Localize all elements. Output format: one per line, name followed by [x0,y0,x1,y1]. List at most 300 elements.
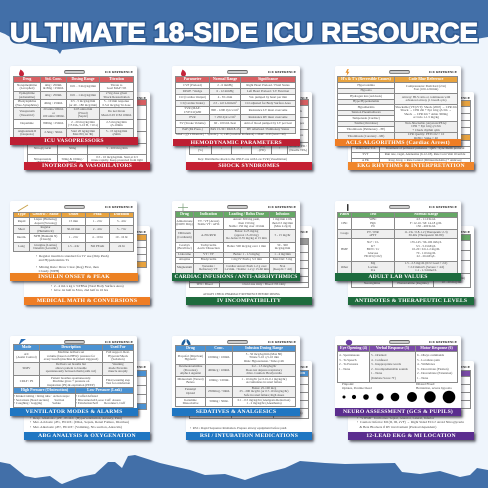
card: sedatives and analgesics (front): Hypnotic [185,357,196,361]
card: ACLS algorithms (front): advanced airway (1 breath q 6s) [406,98,446,102]
card: cardiac infusions and anti-arrhythmics (front): (DOW Drip) [176,222,193,226]
card: antidotes and therapeutic levels (back): Levels [447,235,457,239]
card: medical math and conversions (back): • Give 1st half in 8 hrs, 2nd half in 16 hrs [51,288,108,292]
card: neuro assessment GCS and pupils (front): Dilated Fixed: [416,382,435,386]
card: cardiac infusions and anti-arrhythmics (front): Drug [180,212,189,216]
card: IV incompatibility (back): Rule [260,239,268,243]
icon: lungs [181,339,191,345]
card: adult lab values (front): 22 - 26 mEq/L [417,254,435,258]
card: ventilator modes and alarms (front): inspiration (PS) & expiration (PEEP) [47,383,95,387]
card: ventilator modes and alarms (front): Delivers set breaths but [56,362,86,366]
card: cardiac infusions and anti-arrhythmics (front): then 150 mg [239,220,254,224]
card: neuro assessment GCS and pupils (front): Verbal Response (5) [376,346,409,350]
card: ICU vasopressors (front): (Giapreza) [20,132,34,136]
card: insulin onset and peak (front): ICU REFERENCE [105,205,133,209]
card: adult lab values (front): 70 - 110 mg/dL [416,251,436,255]
card: ventilator modes and alarms (front): • Kinked tubing / biting tube · Action steps: [14,394,70,398]
card: sedatives and analgesics (front): Risk: Hypotension / Tube q12h [244,359,284,363]
card: 12-lead EKG and MI location (back): & Beta Blockers if RV involvement (Preload dependent) [360,425,436,429]
card: sedatives and analgesics (front): 1 - 10 mg/hr (or 0.01-0.1 mg/kg/hr) [241,376,287,380]
card: insulin onset and peak (front): 1.5 - 4 hr [68,244,79,248]
card: insulin onset and peak (front): Cloudy (NPH) [39,269,59,273]
card: inotropes and vasodilators (back): 50mg & 100mg / 250mL [62,156,83,164]
card: insulin onset and peak (front): 10 - 16 hr [115,235,128,239]
card: insulin onset and peak (front): 15 min [69,219,78,223]
card: insulin onset and peak (front): Detemir (Levemir) [33,246,58,250]
card: IV incompatibility (back): Drug [200,239,209,243]
card: shock syndromes (back): CO [219,100,224,104]
card: ICU vasopressors (front) [10,66,137,145]
card: shock syndromes (back): PCWP [256,100,267,104]
card: RSI intubation medications (back): Drug [206,371,215,375]
card: inotropes and vasodilators (back): INOTROPES & VASODILATORS [42,163,132,169]
card: shock syndromes (back): ICU REFERENCE [280,96,308,100]
card: RSI intubation medications (back): Rocuronium [203,409,218,413]
card: ACLS algorithms (front): Fast (100-120/min) [414,87,438,91]
card: shock syndromes (back): , (PD) [258,148,265,152]
card: antidotes and therapeutic levels (back): Drug [368,235,376,239]
card: sedatives and analgesics (front): 25 - 200 mcg/hr (or 0.7-10 mcg/kg/hr) [240,389,288,393]
card: ACLS algorithms (front): CPR + Epi 1mg q3-5m [411,124,441,128]
card: sedatives and analgesics (front): Benzo [186,380,195,384]
card: ICU vasopressors (front): 5 - 15 ng/kg/min [106,128,127,132]
card: hemodynamic parameters (front): Significance [258,77,278,81]
card: cardiac infusions and anti-arrhythmics (front): (Keep K > 4.0) [273,267,292,271]
card: shock syndromes (back): ↑(eq) [258,144,265,148]
card: antidotes and therapeutic levels (back): Phentolamine (Regitine) [397,281,429,285]
card: antidotes and therapeutic levels (back): Lithium [447,264,457,268]
card: hemodynamic parameters (front): ICU REFERENCE [268,70,296,74]
card: cardiac infusions and anti-arrhythmics (front): Cerebyx [179,242,190,246]
card: neuro assessment GCS and pupils (front): 4 - Confused [371,358,387,362]
card: neuro assessment GCS and pupils (front): 1 - None [339,367,350,371]
card: ventilator modes and alarms (front): Machine gives + pressure on [53,379,89,383]
card: hemodynamic parameters (front): PVR [189,115,196,119]
card: medical math and conversions (back): Formula [100,235,114,239]
card: hemodynamic parameters (front): CO adjusted for Body Surface Area [245,101,291,105]
card: neuro assessment GCS and pupils (front): 1 - None [417,376,428,380]
card: adult lab values (front): Lactate [368,264,378,268]
card: adult lab values (front): Na+ / Cl- [367,240,379,244]
card: shock syndromes (back): Key: Distributive shock is the ONLY one with Low SVR (Vasodilation) [198,156,287,160]
card: hemodynamic parameters (front): SV (Stroke Volume) [180,121,205,125]
card: ICU vasopressors (front): Start 20 ng/kg/min [71,128,95,132]
card: cardiac infusions and anti-arrhythmics (front): (Max 2.2g/d) [274,224,291,228]
card: antidotes and therapeutic levels (back) [348,226,474,305]
card: ventilator modes and alarms (front): CPAP / PS [20,379,33,383]
card: 12-lead EKG and MI location (back): I, aVL [428,402,436,406]
card: inotropes and vasodilators (back): Nitroglycerin [34,146,51,150]
card: sedatives and analgesics (front): 500mg / 50mL [210,399,228,403]
card: inotropes and vasodilators (back): titrate rapidly. Keep protected from light [91,158,143,162]
card: ICU vasopressors (front): 4mg / 250mL [45,93,62,97]
card: RSI intubation medications (back): Notes [287,402,295,406]
card: 12-lead EKG and MI location (back): • Caution: Inferior MI (II, III, aVF) → Right Sided ECG? Avoid Nitroglycerin [357,420,464,424]
icon: blood drop [19,70,24,76]
card: shock syndromes (back): Pressors [293,133,303,137]
card: adult lab values (front): F: 12-16 / M: 14-18 g/dL [410,221,442,225]
card: neuro assessment GCS and pupils (front): NEURO ASSESSMENT (GCS & PUPILS) [343,409,453,415]
card: shock syndromes (back): ? [241,146,242,150]
card: 12-lead EKG and MI location (back): V1-V4 [428,386,436,390]
card: hemodynamic parameters (front): Parameter [184,77,201,81]
card: 12-lead EKG and MI location (back): 12-LEAD EKG & MI LOCATION [366,433,456,439]
card: ventilator modes and alarms (front): every breath (machine & patient triggered) [44,357,98,361]
card: ICU vasopressors (front): 0.01 - 1 mcg/kg/min [70,93,96,97]
card: ICU vasopressors (front): Titrate to [111,82,122,86]
card: ICU vasopressors (front): Shock Resuscitation [104,94,129,98]
card: ICU vasopressors (front): 4mg / 250mL [45,82,62,86]
card: ACLS algorithms (front): Hypoxia [360,88,371,92]
card: medical math and conversions (back): MEDICAL MATH & CONVERSIONS [37,298,137,304]
card: 12-lead EKG and MI location (back): • "STEMI" Territories: Septal, Anterior, Lateral, Inferior [357,416,434,420]
card: EKG rhythms and interpretation (back): QRS [422,121,428,125]
card: shock syndromes (back): SHOCK SYNDROMES [218,163,280,169]
card: neuro assessment GCS and pupils (front): Motor Response (6) [420,346,453,350]
card: shock syndromes (back): CVP [276,100,284,104]
card: adult lab values (front): < 2.0 mmol/L (Severe > 4.0) [408,264,444,268]
card: ABG analysis and oxygenation (back): • Met. Alkalosis: pH↑, HCO3↑ (Vomiting, NG suction, Antacids) [30,425,122,429]
card: ACLS algorithms (front): Compressions: Push hard (2 in) [406,84,446,88]
card: adult lab values (front): 150 - 400 K/uL [416,224,436,228]
card: inotropes and vasodilators (back): Titrate [113,110,121,114]
card: ventilator modes and alarms (front): Description [61,345,81,349]
card: ACLS algorithms (front): Code Blue Reference [409,77,443,81]
card: ICU vasopressors (front): Drug [23,77,31,81]
card: RSI intubation medications (back): Onset [287,378,295,382]
card: ventilator modes and alarms (front): Mode [22,345,31,349]
card: ICU vasopressors (front): Goal MAP >65 [107,86,126,90]
card: ventilator modes and alarms (front): Weaning [112,362,124,366]
card: adult lab values (front): 10-20 / 0.6-1.2 mg/dL [412,247,440,251]
card: ICU vasopressors (front): ICU VASOPRESSORS [44,138,104,144]
card: RSI intubation medications (back): Onset / Duration [277,371,305,375]
card: IV incompatibility (back): Flush [260,270,268,274]
card: cardiac infusions and anti-arrhythmics (front): N/A [280,264,285,268]
card: 12-lead EKG and MI location (back): Leads [427,371,437,375]
card: cardiac infusions and anti-arrhythmics (front): Aortic Dissection [197,246,220,250]
card: shock syndromes (back): Tamponade [193,144,208,148]
card: ACLS algorithms (front): ROSC: Spike > 40 [414,136,438,140]
card: IV incompatibility (back): Own Line [258,246,270,250]
card: inotropes and vasodilators (back): Risk: Cyanide Tox [105,162,129,166]
card: insulin onset and peak (front): Glargine (Lantus) [34,242,57,246]
card: cardiac infusions and anti-arrhythmics (front): Magnesium [177,265,192,269]
card: adult lab values (front): PT / INR [367,230,379,234]
card: insulin onset and peak (front): Aspart (Novolog) [34,220,57,224]
card: insulin onset and peak (front): NPH (Humulin N) [34,234,57,238]
card: shock syndromes (back): Relieve: PD / [289,144,307,148]
card: ICU vasopressors (front): (or 40 - 180 mcg/min) [69,102,97,106]
card: shock syndromes (back): (%) [198,148,203,152]
card: hemodynamic parameters (front) [172,66,300,146]
card: ventilator modes and alarms (front): • Disconnected/Loose Cuff Assess [76,398,121,402]
card: ACLS algorithms (front): Hydrogen Ion (Acidosis) [350,94,382,98]
card: sedatives and analgesics (front): Opioid [186,391,195,395]
card: insulin onset and peak (front): 2 - 4 hr [93,227,102,231]
card: shock syndromes (back): Fluids [294,109,302,113]
card: sedatives and analgesics (front): 100mg / 100mL [209,378,229,382]
card: IV incompatibility (back): Almost Everything (Epi, Versed): Run Alone [235,277,293,281]
card: 12-lead EKG and MI location (back): V5-V6 (aVL) [423,394,441,398]
card: hemodynamic parameters (front): 60 - 100 mL/beat [214,121,236,125]
card: neuro assessment GCS and pupils (front): Opiates, Pontine bleed [342,386,372,390]
card: 12-lead EKG and MI location (back): II, III, aVF [425,378,439,382]
card: neuro assessment GCS and pupils (front): 2 - To Pressure [339,362,358,366]
card: cardiac infusions and anti-arrhythmics (front): Refractory VT [199,267,218,271]
card: hemodynamic parameters (front): 2 - 6 mmHg [217,83,233,87]
card: ABG analysis and oxygenation (back): 22-26 [103,396,111,400]
card: neuro assessment GCS and pupils (front): 3 - Inappropriate words [371,362,401,366]
card: neuro assessment GCS and pupils (front): Eye Opening (4) [340,346,367,350]
card: 12-lead EKG and MI location (back) [348,361,474,440]
card: ventilator modes and alarms (front): SIMV [22,366,30,370]
icon: syringe [18,204,28,212]
card: neuro assessment GCS and pupils (front): 5 - Localizes pain [417,358,440,362]
title: ULTIMATE 18-SIDE ICU RESOURCE [10,18,478,48]
card: sedatives and analgesics (front): Titrate 5-10 q 5-10 min [249,355,279,359]
card: neuro assessment GCS and pupils (front): 3 - Decorticate (Flexion) [417,367,449,371]
card: sedatives and analgesics (front): Drug [186,346,195,350]
card: cardiac infusions and anti-arrhythmics (front): Max Dal: 3 mg [273,257,292,261]
card: cardiac infusions and anti-arrhythmics (front): (Cardizem) [177,234,192,238]
card: ICU vasopressors (front): 2.5mg / 50mL [44,130,63,134]
card: adult lab values (front): 30-40s (Therapeutic 60-80) [408,233,444,237]
card: neuro assessment GCS and pupils (front): 1 - None [371,371,382,375]
card: ventilator modes and alarms (front): mode Prevents [109,366,127,370]
card: insulin onset and peak (front): (Cloudy) [40,237,51,241]
card: RSI intubation medications (back): RSI / INTUBATION MEDICATIONS [200,433,298,439]
card: ACLS algorithms (front): ICU REFERENCE [429,70,457,74]
card: ABG analysis and oxygenation (back): • Resp. Alkalosis: pH↑, PCO2↓ (Hyperventilation, Anxiety, Pain) [30,416,122,420]
card: ventilator modes and alarms (front): Test for extubation [106,381,130,385]
card: cardiac infusions and anti-arrhythmics (front): VT / VF (Arrest) [198,219,219,223]
card: ventilator modes and alarms (front): • Extubation/Self Reconnect, Cuff [76,401,125,405]
card: medical math and conversions (back): gtt/min [102,255,112,259]
card: neuro assessment GCS and pupils (front): (Intubate Score ?T) [371,376,396,380]
card: inotropes and vasodilators (back): Conc. [68,100,77,104]
card: ACLS algorithms (front): H's & T's (Reversible Causes) [341,77,391,81]
card: adult lab values (front): Plt [371,224,375,228]
card: RSI intubation medications (back): 0.7 mg/kg [246,411,259,415]
card: cardiac infusions and anti-arrhythmics (front): then 0.5 mg/min [272,220,293,224]
card: IV incompatibility (back): Central [259,262,269,266]
card: insulin onset and peak (front): 1 - 2 hr [93,219,102,223]
card: hemodynamic parameters (front): Resistance LV must overcome [249,108,287,112]
card: neuro assessment GCS and pupils (front): 2 - Decerebrate (Extension) [417,371,452,375]
card: ICU vasopressors (front): (Vasostrict) [20,112,34,116]
card: hemodynamic parameters (front): Amt of blood pumped by LV per beat [244,121,292,125]
card: adult lab values (front): CBC [341,221,348,225]
card: ICU vasopressors (front): q5min [112,132,121,136]
card: shock syndromes (back): ↓ [221,146,222,150]
card: neuro assessment GCS and pupils (front): Pinpoint: [342,382,354,386]
card: ICU vasopressors (front): 0.5-6 mcg/kg/ hr dose [102,102,130,106]
card: cardiac infusions and anti-arrhythmics (front): Diltiazem [178,231,191,235]
card: antidotes and therapeutic levels (back): Vanc [449,253,455,257]
card: ACLS algorithms (front) [335,66,461,146]
card: insulin onset and peak (front): • Mixing Rule: Draw Clear (Reg) First, then [36,265,99,269]
card: inotropes and vasodilators (back): Drug [38,100,47,104]
card: EKG rhythms and interpretation (back): EKG RHYTHMS & INTERPRETATION [357,163,465,169]
card: RSI intubation medications (back): 2 (min) / 30 (min) [279,411,303,415]
icon: medical cross [178,204,188,211]
card: cardiac infusions and anti-arrhythmics (front): ICU REFERENCE [268,205,296,209]
card: EKG rhythms and interpretation (back): Treatment of perfused/ pulseless · QRS · Sync/Defib protocol [386,146,464,150]
card: ABG analysis and oxygenation (back): ABG ANALYSIS & OXYGENATION [38,433,136,439]
card: medical math and conversions (back) [24,226,150,305]
card: antidotes and therapeutic levels (back): Digoxin [447,243,457,247]
card: sedatives and analgesics (front): Dissociative [183,401,198,405]
card: ventilator modes and alarms (front): Patient breathes spontaneously. [51,376,91,380]
card: EKG rhythms and interpretation (back): Rate [422,107,428,111]
card: ACLS algorithms (front): Hypo/Hyperkalemia [353,99,379,103]
card: ICU vasopressors (front): Mean 0.03 U/M 100mL [101,112,132,116]
card: ventilator modes and alarms (front): • Cuffed deflated [76,394,98,398]
card: medical math and conversions (back): mcg/kg/min [99,241,115,245]
card: cardiac infusions and anti-arrhythmics (front): Stable VT / AFib [198,222,219,226]
card: adult lab values (front): 1.1 - 1.3 mmol/L [415,268,437,272]
card: ventilator modes and alarms (front): • Secretions (Need suction) Suction [14,398,64,402]
card: sedatives and analgesics (front): 5 - 50 mcg/kg/min (Max 80) [246,352,282,356]
card: insulin onset and peak (front): 1 - 2 hr [69,235,78,239]
card: inotropes and vasodilators (back): ICU REFERENCE [118,96,146,100]
card: neuro assessment GCS and pupils (front): 3 - To Speech [339,358,357,362]
card: ventilator modes and alarms (front): volume (based on PBW)/ pressure for [47,354,95,358]
card: cardiac infusions and anti-arrhythmics (front): Bradycardia [201,257,216,261]
card: ACLS algorithms (front): Tension Pneumothorax [351,110,381,114]
card: ICU vasopressors (front): or [52,111,55,115]
card: ICU vasopressors (front): (Levophed) [20,86,34,90]
card: insulin onset and peak (front): 24 hr [118,244,125,248]
card: IV incompatibility (back): Sodium Bicarb [195,277,214,281]
card: neuro assessment GCS and pupils (front): 5 - Oriented [371,353,386,357]
card: hemodynamic parameters (front): Normal Range [213,77,237,81]
card: sedatives and analgesics (front) [172,336,300,416]
card: neuro assessment GCS and pupils (front): 6 - Obeys commands [417,353,444,357]
card: RSI intubation medications (back): ICU REFERENCE [280,365,308,369]
card: ventilator modes and alarms (front): muscle atrophy [108,369,128,373]
card: cardiac infusions and anti-arrhythmics (front): Infusion [276,212,289,216]
card: ACLS algorithms (front): or Lido 1-1.5 mg/kg [413,115,439,119]
card: inotropes and vasodilators (back): Titrate [113,135,121,139]
card: ACLS algorithms (front): Shock → CPR 2m + Amio 300mg [404,112,448,116]
card: IV incompatibility (back): IV INCOMPATIBILITY [217,298,281,304]
card: shock syndromes (back): SVR [238,100,245,104]
card: insulin onset and peak (front): Rapid [18,219,25,223]
card: insulin onset and peak (front): 3 - 4 hr [117,219,126,223]
card: hemodynamic parameters (front): CO (Cardiac Output) [179,95,206,99]
card: ACLS algorithms (front): Toxins (Overdose) [354,121,378,125]
card: ventilator modes and alarms (front): VENTILATOR MODES & ALARMS [26,408,122,414]
card: ventilator modes and alarms (front): (Sedation) [111,357,125,361]
card: sedatives and analgesics (front): 400mcg / 100mL [208,368,230,372]
card: ventilator modes and alarms (front): A/C [24,352,29,356]
card: insulin onset and peak (front): INSULIN ONSET & PEAK [38,274,110,280]
card: cardiac infusions and anti-arrhythmics (front): Torsades / [202,264,215,268]
card: ventilator modes and alarms (front): Used For [110,345,126,349]
card: sedatives and analgesics (front): 1 - 2 mg/kg/hr (Anesthesia) [246,401,282,405]
card: EKG rhythms and interpretation (back): Ventricular T/A [355,146,376,150]
card: shock syndromes (back): (Needle TPA) [289,148,307,152]
card: ABG analysis and oxygenation (back): • Resp. Acidosis: pH↓, PCO2↑ (Hypoventilation, COPD, Opioids) [30,411,124,415]
card: IV incompatibility (back): Dedicated [258,254,270,258]
card: cardiac infusions and anti-arrhythmics (front): Amiodarone [177,219,192,223]
card: ICU vasopressors (front): (Adrenaline) [19,94,35,98]
card: hemodynamic parameters (front): 4 - 8 L/min [218,95,232,99]
card: insulin onset and peak (front): and Hyperkalemia Tx [39,258,69,262]
card: cardiac infusions and anti-arrhythmics (front): Bolus: 0.25 mg/kg [235,229,258,233]
card: neuro assessment GCS and pupils (front): 2 - Incomprehensible sounds [371,367,408,371]
card: ICU vasopressors (front): Vasopressin [19,109,35,113]
icon: ventilator [18,339,26,344]
card: antidotes and therapeutic levels (back): Glucagon / Calcium [400,274,426,278]
card: sedatives and analgesics (front): ICU REFERENCE [268,340,296,344]
card: adult lab values (front): Coags [341,231,348,235]
icon: brain [346,340,352,345]
card: ventilator modes and alarms (front): Hypoxia/Shock [108,354,128,358]
card: cardiac infusions and anti-arrhythmics (front): Atropine [179,257,190,261]
card: ABG analysis and oxygenation (back) [24,361,150,440]
card: antidotes and therapeutic levels (back): Neostigmine [364,281,380,285]
card: sedatives and analgesics (front): 0.1 - 0.5 mg/kg/hr (Analgesia Reduction) [238,398,290,402]
card: ICU vasopressors (front): (Fixed) [78,111,88,115]
card: neuro assessment GCS and pupils (front): 4 - Withdraws [417,362,435,366]
card: cardiac infusions and anti-arrhythmics (front): 1 mg IV Push q 3-5 min [231,257,262,261]
card: hemodynamic parameters (front): CVP (Preload) [183,83,202,87]
card: EKG rhythms and interpretation (back): Key Features [414,101,436,105]
card: sedatives and analgesics (front): Ketamine [184,398,197,402]
card: ICU vasopressors (front): Max 80 (1st 3h) [73,132,93,136]
card: RSI intubation medications (back): Duration [285,386,297,390]
card: 12-lead EKG and MI location (back): ICU REFERENCE [442,365,470,369]
card: RSI intubation medications (back) [186,361,312,440]
top blue torn band [0,0,488,54]
card: hemodynamic parameters (front): PAP (PA Press.) [182,127,203,131]
card: ICU vasopressors (front): Norepinephrine [17,82,37,86]
card: ICU vasopressors (front): ICU REFERENCE [105,70,133,74]
card: ventilator modes and alarms (front): Low Pressure (Leak) [87,388,122,392]
card: medical math and conversions (back): mL/hr [103,248,111,252]
card: sedatives and analgesics (front): Accumulates in renal failure [246,380,282,384]
card: shock syndromes (back): Inotropes [292,121,304,125]
card: inotropes and vasodilators (back): Dose [113,100,121,104]
card: ICU vasopressors (front): (Septic) [78,114,88,118]
card: EKG rhythms and interpretation (back): P wave [420,114,430,118]
card: EKG rhythms and interpretation (back): Irreg. Irreg. = Rate Control (Diltiazem/Amio) + Anticoag [388,158,462,162]
card: ACLS algorithms (front): + Check rhythm q2m [412,128,440,132]
card: ICU vasopressors (front): Std. Conc. [45,77,62,81]
card: inotropes and vasodilators (back): 5 - 200 mcg/min [106,146,128,150]
card: hemodynamic parameters (front): 6 - 12 mmHg [216,89,234,93]
card: ACLS algorithms (front): Airway: BLS ratio or continuous with [402,94,450,98]
card: ABG analysis and oxygenation (back): 35-45 [103,387,111,391]
card: adult lab values (front): ICU REFERENCE [429,205,457,209]
card: ACLS algorithms (front): Hypovolemia [357,82,375,86]
card: cardiac infusions and anti-arrhythmics (front): Stable: 150 mg over 10 min [229,224,264,228]
card: ICU vasopressors (front): 2-5 mcg/kg/min [106,120,127,124]
card: EKG rhythms and interpretation (back): Torsades / QT [356,140,374,144]
card: neuro assessment GCS and pupils (front): ICU REFERENCE [429,340,457,344]
card: EKG rhythms and interpretation (back): ICU REFERENCE [442,96,470,100]
card: hemodynamic parameters (front): PAWP / Wedge [183,89,202,93]
card: adult lab values (front): aPTT [369,233,377,237]
card: sedatives and analgesics (front): Infusion Dosing Range [245,346,283,350]
card: IV incompatibility (back) [186,226,312,305]
card: cardiac infusions and anti-arrhythmics (front): Cardiac Arrest: Push 1-2 g over [226,264,267,268]
pupil gauge [342,390,456,404]
card: ICU vasopressors (front): 40mg / 250mL [44,101,63,105]
